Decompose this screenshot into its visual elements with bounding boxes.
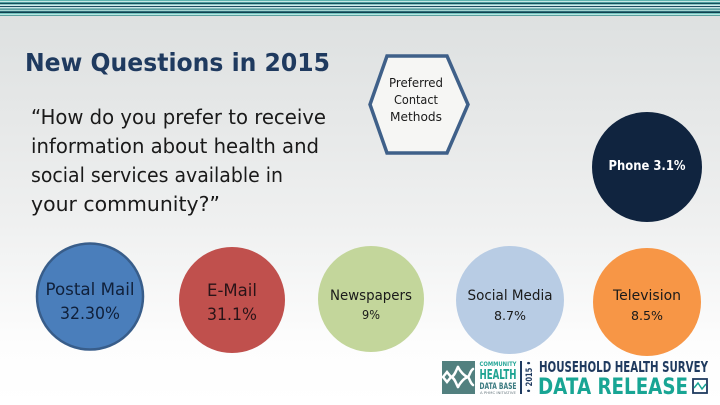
circle: e-mail: E-Mail xyxy=(207,281,257,300)
icon: line chart box xyxy=(693,379,707,393)
question text: “How do you prefer to receive xyxy=(31,105,326,129)
hexagon: preferred contact methods: Methods xyxy=(390,109,442,124)
circle: television: Television xyxy=(612,288,681,304)
circle: postal mail: 32.30% xyxy=(60,304,120,323)
community health data base wordmark: A PHMC INITIATIVE xyxy=(480,391,516,395)
circle: newspapers xyxy=(318,246,424,352)
circle: television xyxy=(593,248,701,356)
circle: phone: Phone 3.1% xyxy=(608,159,686,174)
circle: social media: Social Media xyxy=(468,288,552,304)
circle: newspapers: 9% xyxy=(362,307,380,322)
circle: postal mail: Postal Mail xyxy=(46,280,134,299)
circle: phone xyxy=(592,112,702,222)
circle: e-mail: 31.1% xyxy=(207,305,257,324)
question text xyxy=(31,105,326,216)
community health data base wordmark: HEALTH xyxy=(480,368,516,383)
logo: household health survey data release xyxy=(442,358,709,400)
question text: information about health and xyxy=(31,134,319,158)
circle: social media: 8.7% xyxy=(494,308,526,323)
community health data base wordmark: COMMUNITY xyxy=(480,360,517,368)
hexagon: preferred contact methods: Preferred xyxy=(389,75,443,90)
circle: television: 8.5% xyxy=(631,308,663,323)
icon: community health data base mark xyxy=(442,361,475,394)
hexagon: preferred contact methods xyxy=(370,56,468,153)
circle: newspapers: Newspapers xyxy=(330,288,412,304)
hexagon: preferred contact methods: Contact xyxy=(394,92,438,107)
question text: social services available in xyxy=(31,163,283,187)
circle: postal mail xyxy=(37,244,143,350)
vertical year label: • 2015 • xyxy=(525,361,535,393)
circle: social media xyxy=(456,246,564,354)
data release heading: DATA RELEASE xyxy=(538,375,688,400)
community health data base wordmark: DATA BASE xyxy=(480,382,517,392)
community health data base wordmark xyxy=(480,360,517,395)
title: New Questions in 2015 xyxy=(25,48,330,77)
question text: your community?” xyxy=(31,192,220,216)
circle: e-mail xyxy=(179,247,285,353)
